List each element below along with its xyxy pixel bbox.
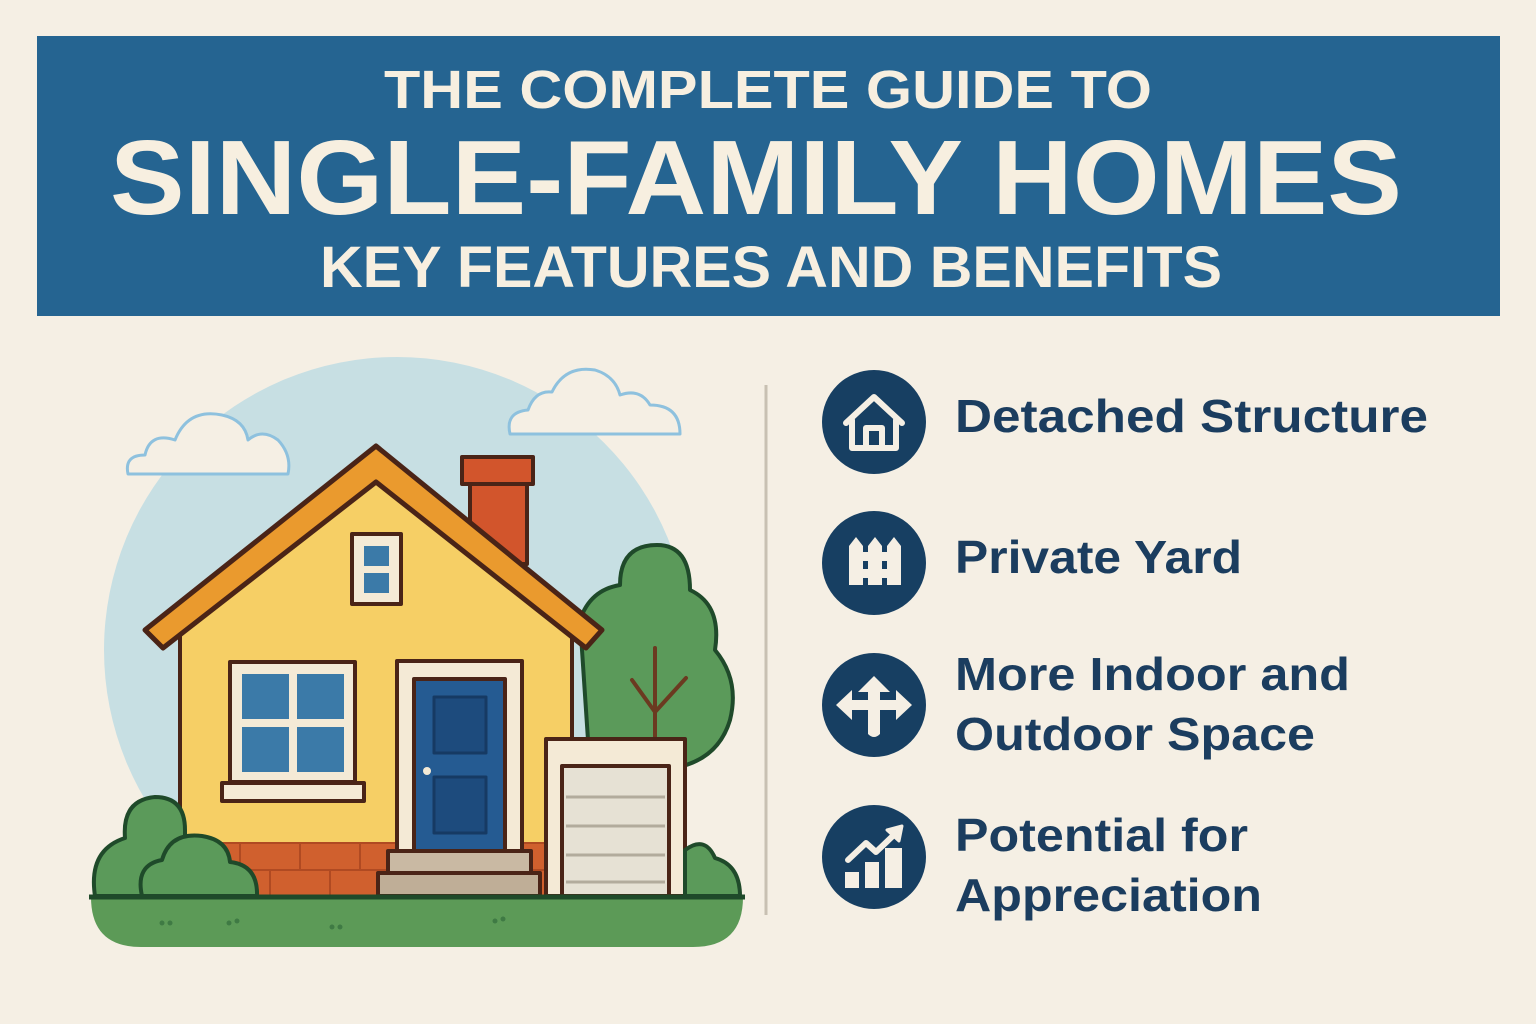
feature: private yard [822, 511, 1242, 615]
upper window [352, 534, 401, 604]
title main: SINGLE-FAMILY HOMES [110, 119, 1402, 237]
cloud right [509, 369, 680, 434]
bushes [94, 797, 740, 896]
divider [764, 385, 768, 915]
icon: fence [822, 511, 926, 615]
cloud left [127, 414, 289, 474]
feature: detached structure [822, 370, 1428, 474]
roof [145, 446, 602, 648]
door [397, 661, 522, 851]
feature: appreciation: Potential for [955, 809, 1248, 861]
subtitle: KEY FEATURES AND BENEFITS [320, 235, 1222, 300]
feature: space [822, 648, 1350, 760]
ground [89, 897, 745, 947]
feature: detached structure: Detached Structure [955, 390, 1428, 442]
feature: private yard: Private Yard [955, 531, 1242, 583]
garage [546, 739, 685, 896]
title line 1: THE COMPLETE GUIDE TO [384, 60, 1152, 120]
steps [378, 851, 540, 896]
main window [222, 662, 364, 801]
chimney [462, 457, 533, 564]
feature: space: Outdoor Space [955, 708, 1315, 760]
icon: house [822, 370, 926, 474]
brick base [182, 843, 570, 896]
tree [580, 545, 733, 770]
title banner [37, 36, 1500, 316]
icon: arrows [822, 653, 926, 757]
icon: growth chart [822, 805, 926, 909]
feature: appreciation: Appreciation [955, 869, 1262, 921]
feature: appreciation [822, 805, 1262, 921]
house wall [180, 474, 572, 900]
feature: space: More Indoor and [955, 648, 1350, 700]
house illustration [89, 357, 745, 947]
